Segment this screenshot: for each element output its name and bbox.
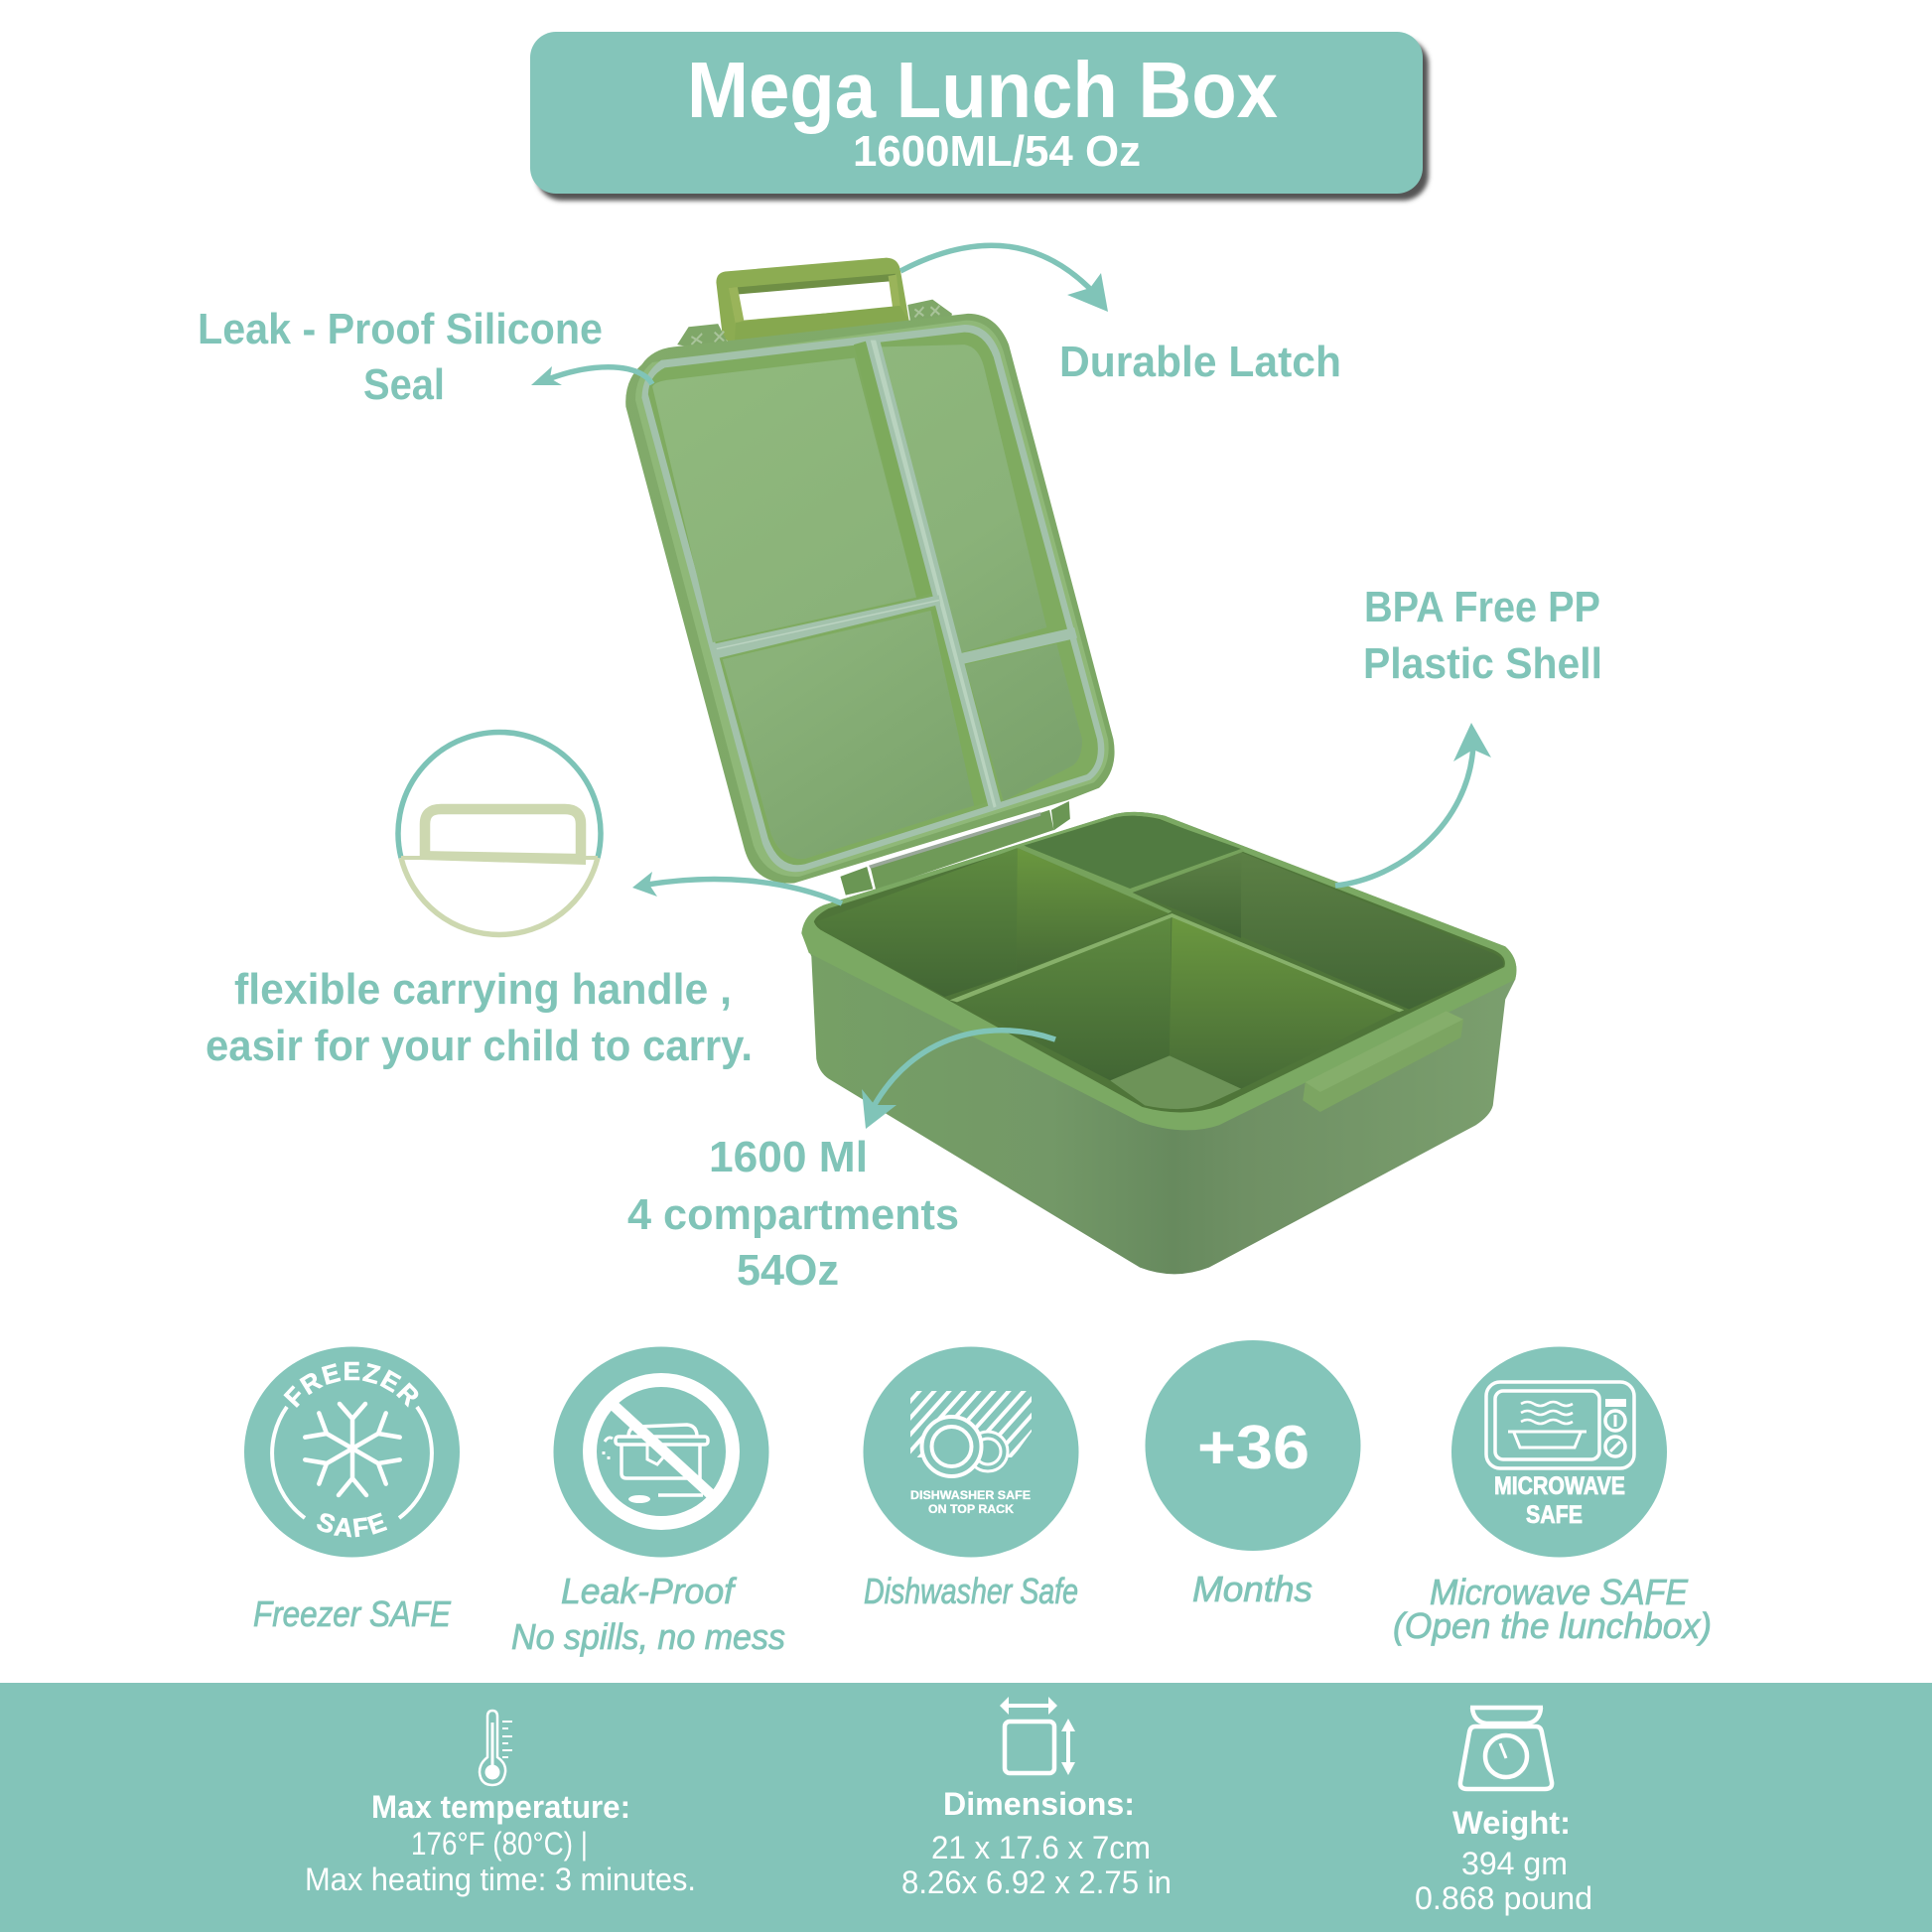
shell label: Plastic Shell	[1363, 639, 1602, 688]
ring and text: FREEZER	[284, 1362, 419, 1408]
seal label: Leak - Proof Silicone	[198, 305, 603, 353]
icon text: MICROWAVE	[1494, 1472, 1625, 1500]
capacity subtitle: 1600ML/54 Oz	[853, 127, 1141, 176]
badge: microwave safe	[1393, 1346, 1712, 1646]
dimensions text: Dimensions:	[943, 1786, 1135, 1822]
handle detail circle	[398, 732, 601, 934]
handle label	[206, 965, 753, 1070]
caption: Microwave SAFE	[1430, 1572, 1689, 1612]
capacity label: 54Oz	[737, 1246, 839, 1295]
badge: freezer safe	[244, 1346, 460, 1634]
title banner	[530, 32, 1429, 201]
ring and text	[270, 1362, 434, 1537]
icon: microwave	[1486, 1382, 1634, 1468]
caption	[511, 1571, 785, 1657]
arrow: latch	[900, 245, 1108, 312]
temperature text: Max temperature:	[371, 1789, 630, 1825]
badge: leak-proof	[511, 1346, 785, 1657]
temperature text	[305, 1789, 696, 1897]
caption: Months	[1192, 1569, 1312, 1609]
title: Mega Lunch Box	[687, 46, 1278, 134]
icon: thermometer	[480, 1711, 512, 1785]
icon text	[910, 1490, 1031, 1516]
arrow: seal	[531, 366, 652, 385]
shell label	[1363, 583, 1602, 688]
icon: dimensions	[1000, 1697, 1075, 1775]
badge: dishwasher safe	[864, 1346, 1078, 1604]
icon text: ON TOP RACK	[928, 1504, 1015, 1516]
capacity label: 1600 Ml	[709, 1133, 868, 1181]
capacity label	[627, 1133, 959, 1295]
ring and text: SAFE	[317, 1513, 387, 1537]
icon: plates	[910, 1391, 1032, 1478]
weight text: 0.868 pound	[1415, 1880, 1592, 1916]
weight text: 394 gm	[1461, 1846, 1568, 1881]
caption: Freezer SAFE	[253, 1593, 452, 1634]
capacity label: 4 compartments	[627, 1190, 959, 1239]
icon text: DISHWASHER SAFE	[910, 1490, 1031, 1502]
temperature text: Max heating time: 3 minutes.	[305, 1862, 696, 1897]
handle label: flexible carrying handle ,	[234, 965, 732, 1014]
callout: BPA free shell	[1335, 583, 1602, 886]
weight text	[1415, 1805, 1592, 1916]
handle label: easir for your child to carry.	[206, 1022, 753, 1070]
callout: capacity	[627, 1031, 1055, 1295]
callout: carrying handle	[206, 732, 842, 1070]
dimensions text: 8.26x 6.92 x 2.75 in	[901, 1864, 1172, 1900]
callout: leak-proof silicone seal	[198, 305, 652, 409]
icon text	[1494, 1472, 1625, 1529]
caption: Leak-Proof	[561, 1571, 738, 1611]
seal label: Seal	[363, 360, 445, 409]
caption: (Open the lunchbox)	[1393, 1605, 1712, 1646]
specifications band	[0, 1683, 1932, 1932]
icon: no-leak box	[590, 1380, 733, 1523]
icon: scale	[1460, 1708, 1552, 1789]
icon text: SAFE	[1526, 1501, 1583, 1529]
callout: durable latch	[900, 245, 1341, 386]
age number: +36	[1197, 1414, 1310, 1482]
base	[801, 812, 1516, 1274]
latch label: Durable Latch	[1059, 338, 1341, 386]
spec: temperature	[305, 1711, 696, 1897]
dimensions text: 21 x 17.6 x 7cm	[931, 1830, 1151, 1865]
icon: snowflake	[305, 1404, 400, 1495]
arrow: shell	[1335, 723, 1491, 886]
spec: dimensions	[901, 1697, 1172, 1900]
arrow: capacity	[862, 1031, 1055, 1129]
lid	[625, 258, 1115, 896]
weight text: Weight:	[1452, 1805, 1571, 1841]
dimensions text	[901, 1786, 1172, 1900]
seal label	[198, 305, 603, 409]
caption: No spills, no mess	[511, 1616, 785, 1657]
temperature text: 176°F (80°C) |	[411, 1826, 588, 1862]
badge: months	[1146, 1340, 1360, 1609]
product photo: open lunch box	[625, 258, 1516, 1274]
shell label: BPA Free PP	[1364, 583, 1600, 631]
arrow: handle	[632, 872, 842, 903]
caption: Dishwasher Safe	[864, 1571, 1078, 1611]
spec: weight	[1415, 1708, 1592, 1916]
caption	[1393, 1572, 1712, 1646]
